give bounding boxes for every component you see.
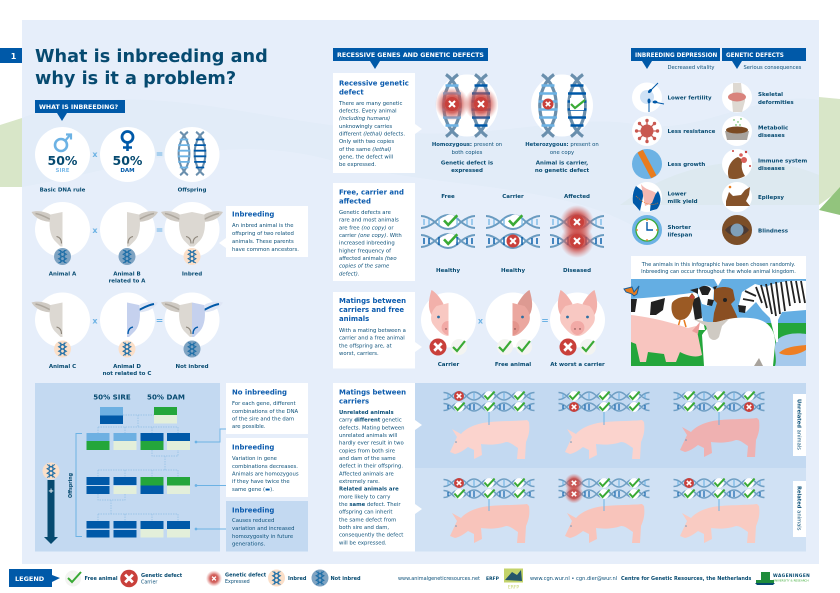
- pig: free animal: Free animal: [495, 362, 531, 368]
- text box: recessive genetic defect: [333, 73, 422, 173]
- diagram: carrier: Healthy: [501, 268, 525, 274]
- side label: Related animals: [796, 486, 802, 531]
- list: shorter lifespan: Shorter: [668, 225, 691, 231]
- text box: free, carrier and affected: [333, 183, 415, 281]
- diagram: free: Free: [441, 194, 455, 200]
- text box: matings carriers and free animals: worst, carriers.: [339, 351, 379, 357]
- text box: free, carrier and affected: Free, carrier and: [339, 188, 404, 196]
- text box: recessive genetic defect: gene, the defect will: [339, 154, 393, 160]
- tag: genetic defects: Serious consequences: [744, 65, 802, 71]
- inbreeding arrow: +: [48, 487, 54, 495]
- text box: recessive genetic defect: Only with two copies: [339, 139, 394, 145]
- animal D: [100, 292, 158, 377]
- diagram: homozygous: Homozygous: present on: [432, 142, 502, 148]
- text box: matings between carriers: Unrelated animals: [339, 410, 394, 416]
- inbred offspring: Inbred: [182, 272, 202, 278]
- equals sign: =: [156, 150, 163, 160]
- ERFP logo: ERFP: [508, 584, 519, 590]
- animal A: Animal A: [49, 272, 77, 278]
- legend: expressed: [206, 570, 267, 587]
- tag: inbreeding depression: [631, 48, 720, 71]
- pig: carrier: [421, 290, 476, 368]
- list: lower fertility: Lower fertility: [668, 96, 712, 102]
- list: lower fertility: [632, 82, 712, 112]
- text box: inbreeding variation: Inbreeding: [232, 444, 274, 452]
- label: offspring: Offspring: [178, 188, 206, 194]
- text box: matings between carriers: more likely to carry: [339, 494, 390, 500]
- text box: free, carrier and affected: carrier (one copy). With: [339, 233, 402, 239]
- dog: [712, 287, 739, 330]
- diagram: carrier: [486, 194, 540, 274]
- tag: genetic defects: [722, 48, 806, 71]
- row: sheep related parents: [32, 202, 223, 284]
- text box: matings carriers and free animals: With a mating between a: [339, 328, 406, 334]
- text box: matings between carriers: both sire and dam,: [339, 525, 389, 531]
- circle: offspring DNA: [164, 127, 220, 182]
- legend tag: LEGEND: [15, 575, 45, 583]
- multiply sign: x: [92, 150, 98, 159]
- section number: 1: [11, 52, 17, 61]
- text box: recessive genetic defect: Recessive genetic: [339, 80, 409, 88]
- diagram: heterozygous: Heterozygous: present on: [525, 142, 599, 148]
- pig: free animal: [486, 290, 540, 368]
- pig: offspring at worst a carrier: At worst a carrier: [550, 362, 605, 368]
- tag: inbreeding depression: INBREEDING DEPRESSION: [635, 53, 718, 59]
- circle: sire 50%: 50%: [48, 153, 78, 168]
- butterfly: [624, 286, 639, 296]
- text box: matings between carriers: carry different genetic: [339, 418, 402, 424]
- list: lower milk yield: [632, 182, 698, 212]
- text box: free, carrier and affected: affected animals (two: [339, 256, 397, 262]
- list: skeletal deformities: deformities: [758, 100, 794, 106]
- chicken: [671, 293, 695, 327]
- text box: inbreeding homozygosity: [226, 501, 308, 552]
- text box: inbreeding: animals. These parents: [232, 239, 294, 245]
- note: animals chosen randomly: [631, 256, 806, 279]
- diagram: free: [421, 194, 475, 274]
- list: lower milk yield: milk yield: [668, 199, 698, 205]
- text box: inbreeding: have common ancestors.: [232, 247, 299, 253]
- note: animals chosen randomly: The animals in this infographic have been chosen randomly.: [641, 262, 796, 268]
- diagram: heterozygous: no genetic defect: [535, 168, 590, 174]
- website link: www.animalgeneticresources.net: [398, 576, 480, 582]
- multiply sign: x: [92, 226, 98, 235]
- text box: free, carrier and affected: are free (no copy) or: [339, 225, 394, 231]
- multiply sign: x: [92, 316, 98, 326]
- set 1: [444, 391, 534, 459]
- text box: no inbreeding: No inbreeding: [232, 388, 287, 396]
- footer: websites and logos: [398, 568, 810, 590]
- list: less resistance: [632, 116, 716, 146]
- text box: recessive genetic defect: unknowingly carries: [339, 124, 392, 130]
- diagram: homozygous: [432, 74, 502, 174]
- pig: [631, 315, 702, 362]
- side label: Unrelated animals: [796, 399, 802, 450]
- legend: not inbred: [312, 570, 361, 586]
- list: epilepsy: Epilepsy: [758, 195, 784, 201]
- ERFP logo: [504, 568, 523, 590]
- Wageningen logo: UNIVERSITY & RESEARCH: [773, 578, 809, 582]
- text box: matings between carriers: Matings between: [339, 388, 406, 396]
- text box: matings carriers and free animals: carrier and a free animal: [339, 336, 405, 342]
- animal B: [100, 202, 158, 284]
- not inbred offspring: [161, 292, 223, 370]
- background hills left and right: [0, 97, 840, 215]
- parent headers: 50% SIRE: [93, 392, 131, 402]
- text box: matings between carriers: [333, 383, 422, 552]
- text box: matings between carriers: will be expressed.: [339, 540, 387, 546]
- diagram: carrier: Carrier: [502, 194, 524, 200]
- animal C: [32, 292, 90, 370]
- text box: free, carrier and affected: increased inbreeding: [339, 241, 395, 247]
- ERFP label: ERFP: [486, 576, 500, 582]
- diagram: homozygous: Genetic defect is: [441, 160, 494, 166]
- legend: inbred: [268, 570, 307, 586]
- offspring bracket and label: [68, 434, 82, 536]
- text box: recessive genetic defect: be expressed.: [339, 162, 376, 168]
- text box: no inbreeding: combinations of the DNA: [232, 409, 299, 415]
- legend: expressed: Genetic defect: [225, 572, 267, 578]
- pig: offspring at worst a carrier: [550, 290, 605, 368]
- text box: matings between carriers: hardly ever result in two: [339, 441, 404, 447]
- text box: no inbreeding: of the sire and the dam: [232, 416, 294, 422]
- row: sheep unrelated parents: [32, 292, 223, 377]
- text box: matings between carriers: Affected animals are: [339, 471, 394, 477]
- note: animals chosen randomly: Inbreeding can occur throughout the whole animal kingdom.: [641, 269, 796, 275]
- sheep: [693, 318, 775, 366]
- text box: matings between carriers: defects. Mating between: [339, 425, 405, 431]
- text box: matings between carriers: extremely rare.: [339, 479, 380, 485]
- legend: inbred: Inbred: [288, 576, 307, 582]
- list: immune system diseases: Immune system: [758, 158, 807, 164]
- text box: no inbreeding: For each gene, different: [232, 401, 296, 407]
- text box: inbreeding variation: if they have twice the: [232, 479, 290, 485]
- offspring bracket and label: Offspring: [68, 472, 74, 498]
- list: immune system diseases: diseases: [758, 166, 786, 172]
- inbred offspring: [161, 202, 223, 278]
- animal C: Animal C: [49, 364, 76, 370]
- text box: recessive genetic defect: defect: [339, 88, 364, 96]
- legend: [9, 569, 361, 587]
- illustration: group of animals: [624, 279, 806, 366]
- set 2: [558, 474, 650, 543]
- text box: matings between carriers: and dam of the same: [339, 456, 396, 462]
- circle: sire 50%: [35, 127, 90, 182]
- tag: genetic defects: GENETIC DEFECTS: [726, 53, 784, 59]
- list: blindness: [722, 215, 789, 245]
- parent headers: 50% DAM: [147, 392, 185, 402]
- circle: sire 50%: SIRE: [56, 168, 70, 174]
- tag: recessive genes: RECESSIVE GENES AND GENETIC DEFECTS: [337, 52, 484, 59]
- list: metabolic diseases: diseases: [758, 133, 786, 139]
- text box: inbreeding: An inbred animal is the: [232, 223, 293, 229]
- list: metabolic diseases: [722, 116, 788, 146]
- tag: what is inbreeding: WHAT IS INBREEDING?: [39, 104, 118, 111]
- animal D: not related to C: [103, 371, 151, 377]
- circle: dam 50%: 50%: [113, 153, 143, 168]
- zebra: [738, 281, 806, 342]
- row: basic DNA rule: [35, 127, 220, 194]
- text box: matings between carriers: unrelated animals will: [339, 433, 397, 439]
- legend: carrier: [120, 570, 183, 587]
- set 1: [444, 478, 534, 543]
- text box: matings between carriers: defect in their offspring.: [339, 464, 403, 470]
- set 3: [674, 478, 764, 543]
- cow: [631, 286, 717, 330]
- text box: free, carrier and affected: higher frequency of: [339, 248, 391, 254]
- inbreeding arrow: [42, 462, 60, 544]
- text box: matings carriers and free animals: carriers and free: [339, 306, 404, 314]
- list: blindness: Blindness: [758, 228, 789, 234]
- diagram: affected: Affected: [564, 194, 590, 200]
- text box: inbreeding variation: [226, 438, 308, 497]
- gene inheritance diagram: [35, 383, 226, 552]
- text box: inbreeding homozygosity: Inbreeding: [232, 506, 274, 514]
- generation 3 genes: [86, 521, 190, 538]
- text box: inbreeding homozygosity: homozygosity in future: [232, 534, 293, 540]
- animal D: Animal D: [113, 364, 141, 370]
- side label: [793, 481, 806, 537]
- text box: inbreeding variation: combinations decreases.: [232, 464, 298, 470]
- diagram: affected: [550, 194, 604, 274]
- multiply sign: x: [478, 316, 484, 326]
- title: What is inbreeding and: [35, 47, 268, 67]
- text box: free, carrier and affected: rare and most animals: [339, 218, 399, 224]
- list: epilepsy: [722, 182, 784, 212]
- list: lower milk yield: Lower: [668, 192, 687, 198]
- diagram: heterozygous: one copy: [550, 150, 574, 156]
- text box: matings between carriers: the same defect. Their: [339, 502, 401, 508]
- animal A: [32, 202, 90, 278]
- text box: inbreeding homozygosity: Causes reduced: [232, 518, 274, 524]
- diagram: homozygous: expressed: [451, 168, 483, 174]
- contact details: www.cgn.wur.nl • cgn.dier@wur.nl: [530, 576, 617, 582]
- text box: inbreeding variation: same gene (▬).: [232, 487, 274, 493]
- text box: matings carriers and free animals: Matings between: [339, 297, 406, 305]
- animal B: Animal B: [113, 272, 141, 278]
- title: why is it a problem?: [35, 69, 236, 89]
- text box: recessive genetic defect: different (lethal) defects.: [339, 132, 405, 138]
- set 3: [674, 391, 764, 457]
- text box: inbreeding homozygosity: variation and increased: [232, 526, 294, 532]
- centre name: Centre for Genetic Resources, the Netherlands: [621, 576, 751, 582]
- text box: inbreeding homozygosity: generations.: [232, 542, 266, 548]
- legend: carrier: Carrier: [141, 580, 157, 586]
- legend: free animal: Free animal: [84, 576, 118, 582]
- text box: no inbreeding: [226, 383, 308, 434]
- list: shorter lifespan: [632, 215, 692, 245]
- text box: recessive genetic defect: (including humans): [339, 116, 390, 122]
- text box: recessive genetic defect: defects. Every animal: [339, 108, 397, 114]
- list: metabolic diseases: Metabolic: [758, 126, 788, 132]
- legend: expressed: Expressed: [225, 579, 250, 585]
- not inbred offspring: Not inbred: [175, 364, 209, 370]
- text box: inbreeding: offspring of two related: [232, 231, 294, 237]
- text box: recessive genetic defect: There are many genetic: [338, 101, 402, 107]
- parent genes: [100, 407, 177, 424]
- connectors: [98, 415, 178, 521]
- equals sign: =: [541, 316, 549, 326]
- text box: matings between carriers: Related animals are: [339, 487, 399, 493]
- tag: inbreeding depression: Decreased vitality: [668, 65, 714, 71]
- tag: recessive genes: [333, 48, 488, 69]
- generation 1 genes: [86, 433, 190, 450]
- equals sign: =: [156, 316, 163, 326]
- tag: what is inbreeding: [35, 100, 125, 121]
- diagram: free: Healthy: [436, 268, 460, 274]
- band: unrelated animals: [415, 383, 806, 468]
- diagram: affected: Diseased: [563, 268, 591, 274]
- text box: matings between carriers: copies from both sire: [339, 448, 395, 454]
- list: less growth: [632, 149, 705, 179]
- text box: inbreeding variation: Animals are homozygous: [232, 472, 299, 478]
- legend: free animal: [65, 570, 118, 586]
- set 2: [558, 391, 650, 459]
- Wageningen logo: [755, 572, 810, 585]
- text box: matings between carriers: consequently the defect: [339, 533, 403, 539]
- text box: matings carriers and free animals: the offspring are, at: [339, 343, 392, 349]
- diagram: heterozygous: Animal is carrier,: [536, 160, 588, 166]
- text box: recessive genetic defect: of the same (lethal): [339, 147, 391, 153]
- text box: inbreeding: Inbreeding: [232, 210, 274, 218]
- text box: matings carriers and free animals: [333, 292, 422, 368]
- list: immune system diseases: [722, 149, 807, 179]
- label: basic DNA rule: Basic DNA rule: [40, 188, 86, 194]
- list: skeletal deformities: Skeletal: [758, 92, 783, 98]
- text box: matings between carriers: offspring can inherit: [339, 510, 392, 516]
- section number: [0, 48, 22, 63]
- list: less growth: Less growth: [668, 162, 705, 168]
- side label: [793, 394, 806, 456]
- leader lines: [195, 429, 226, 530]
- text box: free, carrier and affected: copies of the same: [339, 264, 390, 270]
- fish: [779, 345, 806, 355]
- pig: carrier: Carrier: [438, 362, 460, 368]
- list: skeletal deformities: [722, 82, 794, 112]
- equals sign: =: [156, 226, 163, 236]
- text box: matings between carriers: carriers: [339, 398, 369, 406]
- text box: free, carrier and affected: Genetic defects are: [339, 210, 391, 216]
- text box: no inbreeding: are possible.: [232, 424, 266, 430]
- text box: matings between carriers: the same defect from: [339, 517, 396, 523]
- animal B: related to A: [109, 278, 146, 284]
- Wageningen logo: WAGENINGEN: [773, 573, 810, 579]
- diagram: heterozygous: [525, 74, 599, 174]
- legend tag: [9, 569, 60, 587]
- diagram: homozygous: both copies: [452, 150, 483, 156]
- parent headers: [93, 392, 185, 402]
- title: [35, 47, 268, 89]
- list: less resistance: Less resistance: [668, 129, 716, 135]
- generation 2 genes: [86, 477, 190, 494]
- text box: free, carrier and affected: defect).: [339, 271, 359, 277]
- circle: dam 50%: [100, 127, 155, 182]
- legend: carrier: Genetic defect: [141, 573, 183, 579]
- list: shorter lifespan: lifespan: [668, 232, 692, 238]
- circle: dam 50%: DAM: [120, 168, 135, 174]
- text box: inbreeding: [219, 206, 308, 257]
- text box: free, carrier and affected: affected: [339, 198, 371, 206]
- legend: not inbred: Not inbred: [330, 576, 361, 582]
- text box: inbreeding variation: Variation in gene: [232, 456, 277, 462]
- text box: matings carriers and free animals: animals: [339, 315, 369, 323]
- band: related animals: [415, 468, 806, 552]
